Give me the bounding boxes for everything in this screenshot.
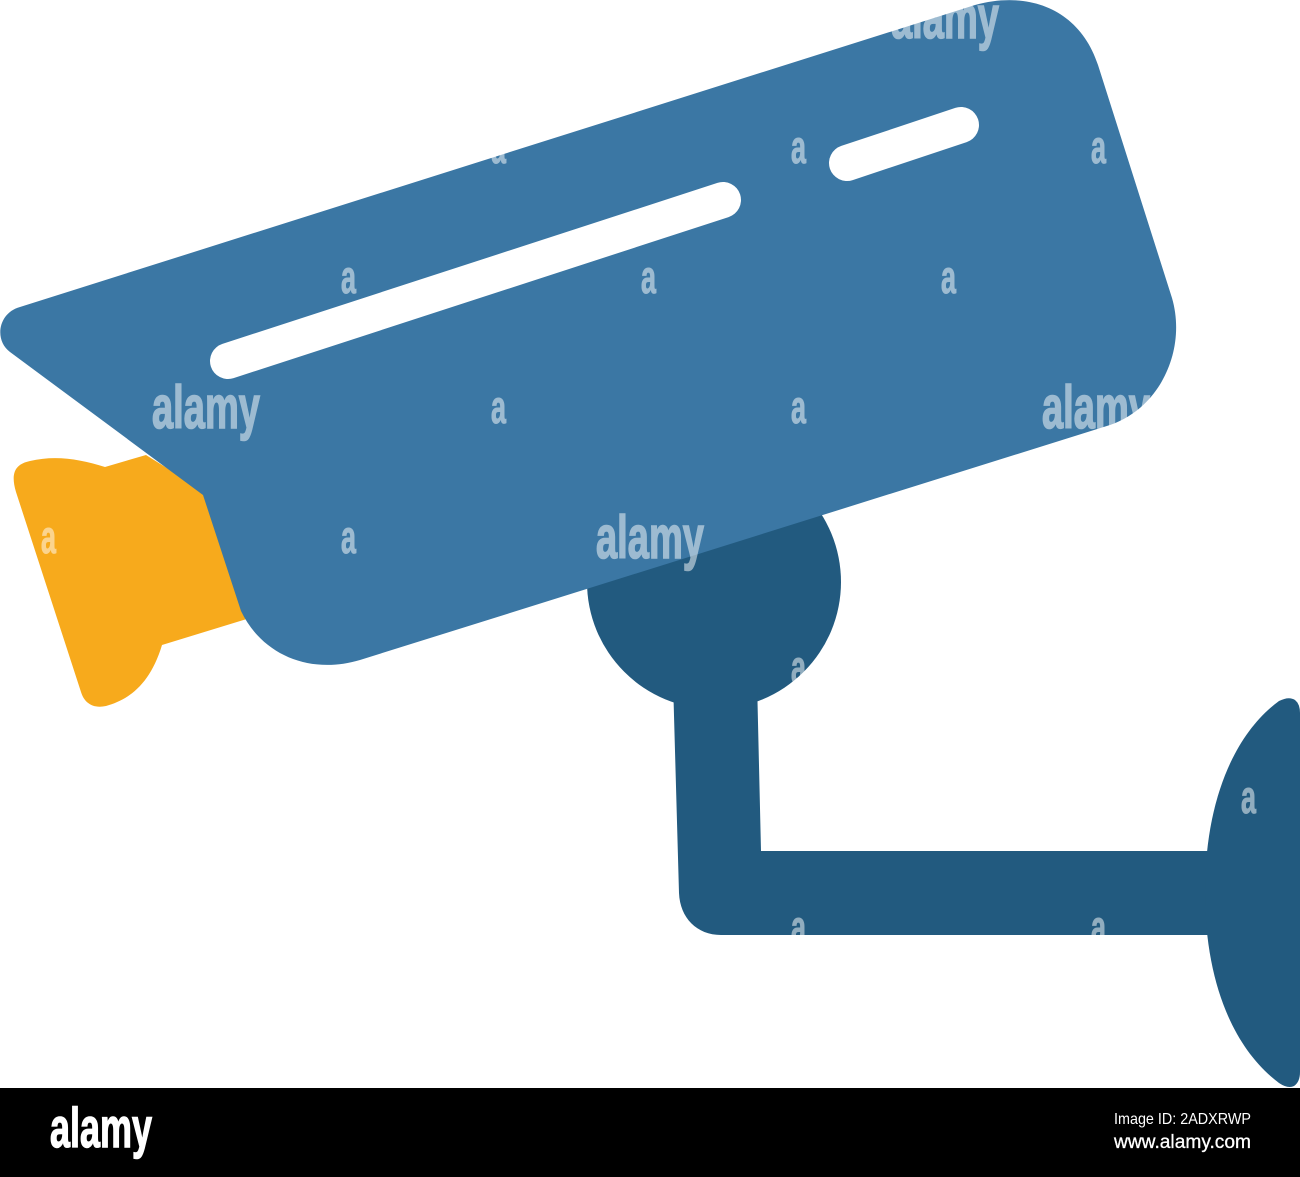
mount arm: [673, 680, 1225, 935]
watermark word center: alamy: [596, 504, 704, 571]
body highlight long: [228, 200, 723, 361]
website: www.alamy.com: [1113, 1132, 1251, 1153]
watermark letters: a: [641, 251, 656, 303]
watermark letters: a: [941, 251, 956, 303]
watermark letters: a: [791, 121, 806, 173]
body highlight short: [847, 125, 961, 163]
watermark letters: a: [1091, 901, 1106, 953]
watermark letters: a: [1091, 121, 1106, 173]
mount ball joint: [587, 455, 841, 709]
watermark letters: a: [491, 121, 506, 173]
watermark letters: a: [1241, 771, 1256, 823]
footer bar: [0, 1088, 1300, 1177]
watermark letters: a: [341, 251, 356, 303]
watermark word right: alamy: [1042, 374, 1150, 441]
wall plate: [1205, 698, 1300, 1087]
camera body: [0, 0, 1176, 665]
watermark word left: alamy: [152, 374, 260, 441]
image id: Image ID: 2ADXRWP: [1114, 1111, 1251, 1128]
wall mount bracket: [587, 455, 1300, 1087]
watermark letters: a: [791, 641, 806, 693]
watermarks: [41, 0, 1256, 953]
watermark letters: [41, 121, 1256, 953]
watermark letters: a: [491, 381, 506, 433]
camera lens: [14, 455, 250, 707]
footer logo: alamy: [50, 1096, 152, 1159]
watermark letters: a: [41, 511, 56, 563]
watermark letters: a: [791, 381, 806, 433]
watermark letters: a: [341, 511, 356, 563]
watermark letters: a: [791, 901, 806, 953]
